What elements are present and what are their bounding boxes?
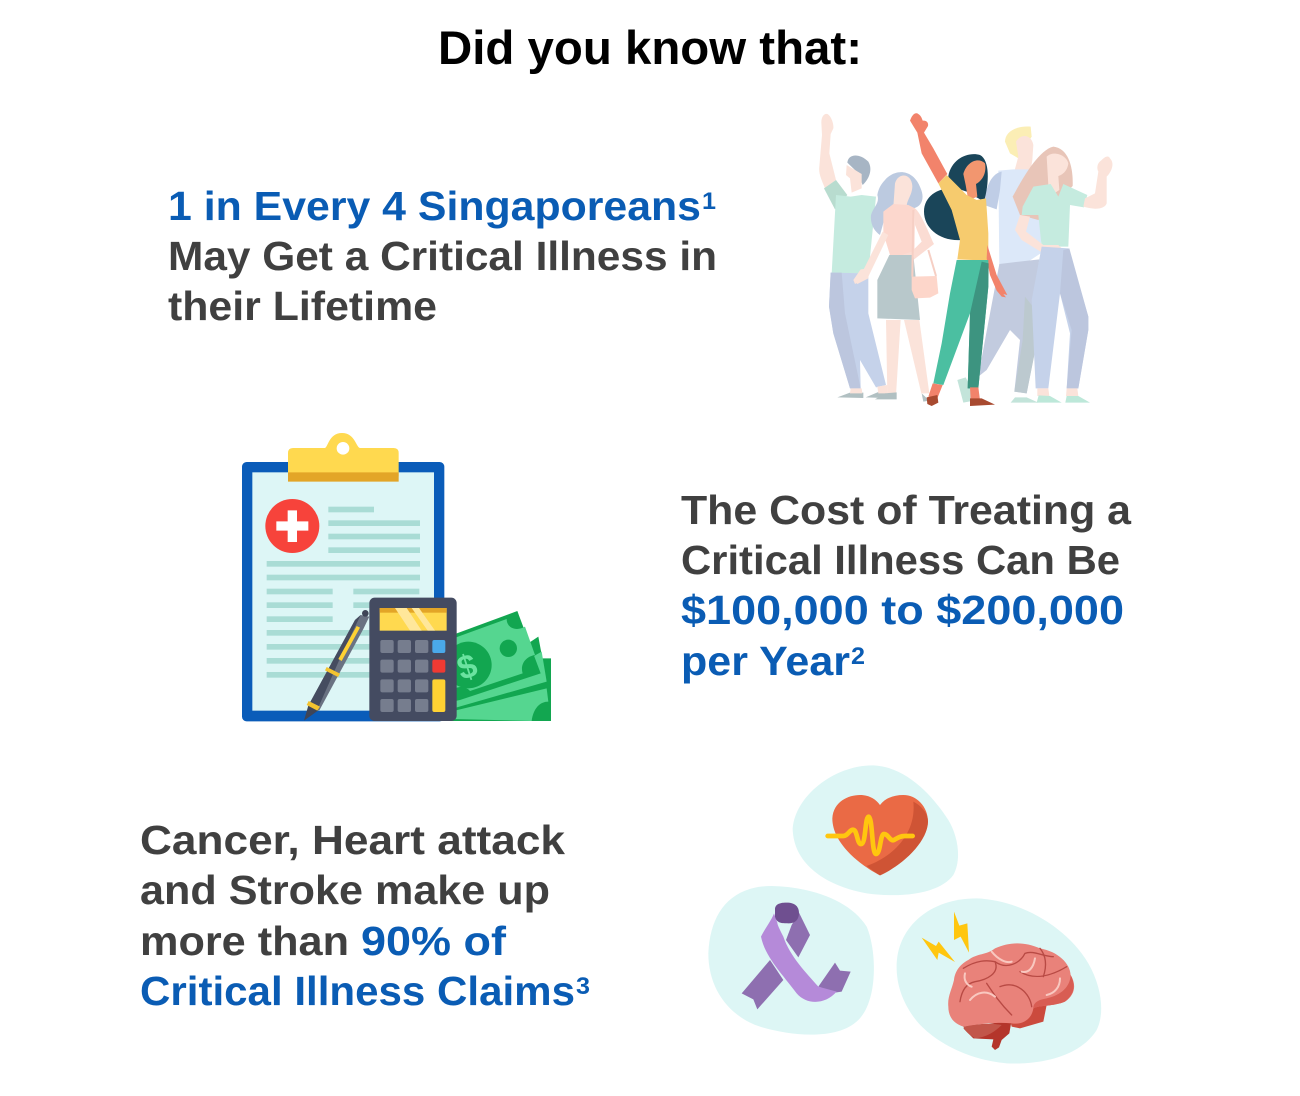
text block: cancer, heart attack and stroke: Cancer, Heart attack: [140, 817, 565, 863]
person: woman with bag: [853, 172, 938, 402]
title: Did you know that:: [438, 21, 862, 74]
text block: cancer, heart attack and stroke: 3: [576, 973, 590, 1000]
text block: 1 in 4 Singaporeans: May Get a Critical Illness in: [168, 233, 717, 279]
icon: cash: $: [453, 647, 482, 688]
text block: cancer, heart attack and stroke: more than: [140, 918, 349, 964]
text block: 1 in 4 Singaporeans: 1: [702, 188, 716, 215]
icon: clip: [288, 433, 399, 482]
text block: cost of treating: $100,000 to $200,000: [681, 587, 1124, 633]
text block: 1 in 4 Singaporeans: [168, 183, 717, 329]
icon: calculator: [369, 598, 457, 721]
illustration: disease icons: [708, 765, 1101, 1064]
icon: cash: [443, 611, 551, 721]
document lines: [267, 507, 420, 678]
text block: cancer, heart attack and stroke: Critical Illness Claims: [140, 968, 575, 1014]
person: blond man: [957, 126, 1042, 403]
text block: cancer, heart attack and stroke: and Stroke make up: [140, 867, 550, 913]
person: woman in mint: [1013, 147, 1112, 403]
icon: clipboard: [242, 462, 444, 721]
illustration: group of people: [819, 113, 1112, 406]
text block: cost of treating: Critical Illness Can Be: [681, 537, 1120, 583]
icon: brain blob: [897, 898, 1101, 1064]
text block: cancer, heart attack and stroke: [140, 817, 590, 1014]
text block: cancer, heart attack and stroke: 90% of: [361, 918, 506, 964]
person: central woman in yellow: [910, 113, 1007, 406]
text block: cost of treating: The Cost of Treating a: [681, 487, 1132, 533]
person: man waving, left: [819, 114, 887, 398]
text block: 1 in 4 Singaporeans: 1 in Every 4 Singaporeans: [168, 183, 701, 229]
text block: 1 in 4 Singaporeans: their Lifetime: [168, 283, 437, 329]
icon: heart blob: [793, 765, 958, 895]
icon: ribbon blob: [708, 886, 874, 1035]
icon: pen: [304, 610, 369, 721]
illustration: medical bill clipboard, calculator and cash: [242, 433, 551, 721]
text block: cost of treating: 2: [851, 643, 865, 670]
text block: cost of treating: per Year: [681, 638, 850, 684]
text block: cost of treating: [681, 487, 1132, 684]
